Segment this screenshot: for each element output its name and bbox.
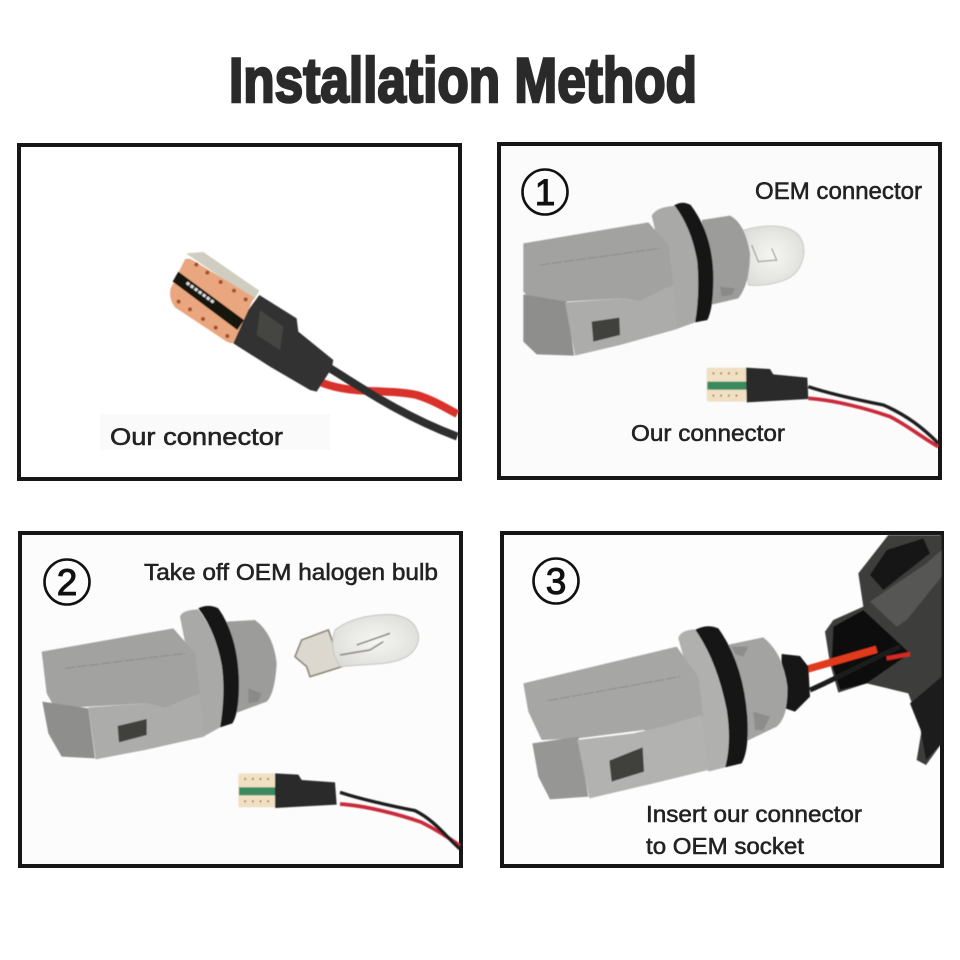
removed halogen bulb	[295, 614, 419, 677]
label: insert connector: Insert our connector	[646, 801, 862, 827]
panel: step 2	[20, 533, 461, 866]
step number 2: 2	[57, 562, 77, 603]
inserted socket	[523, 626, 788, 799]
title: Installation Method	[229, 46, 697, 116]
small connector with wires	[238, 773, 460, 849]
small connector with wires	[707, 368, 938, 447]
label: to OEM socket: to OEM socket	[646, 833, 805, 859]
step number 3: 3	[546, 561, 566, 602]
label: our connector: Our connector	[631, 420, 785, 446]
step number 3	[534, 558, 578, 604]
step number 2	[44, 560, 90, 604]
label: take off bulb: Take off OEM halogen bulb	[144, 559, 438, 585]
panel: step 3	[502, 533, 942, 866]
housing and wires	[780, 535, 942, 765]
step number 1	[522, 170, 568, 214]
label: OEM connector: OEM connector	[755, 178, 922, 205]
label: our connector: Our connector	[110, 424, 283, 451]
panel: step 1	[499, 144, 940, 478]
socket and bulb photo	[523, 203, 804, 356]
socket photo	[42, 606, 277, 759]
connector photo: close-up board and wires	[170, 252, 457, 437]
label band	[100, 414, 330, 450]
panel: our connector	[19, 145, 460, 479]
step number 1: 1	[535, 172, 555, 213]
